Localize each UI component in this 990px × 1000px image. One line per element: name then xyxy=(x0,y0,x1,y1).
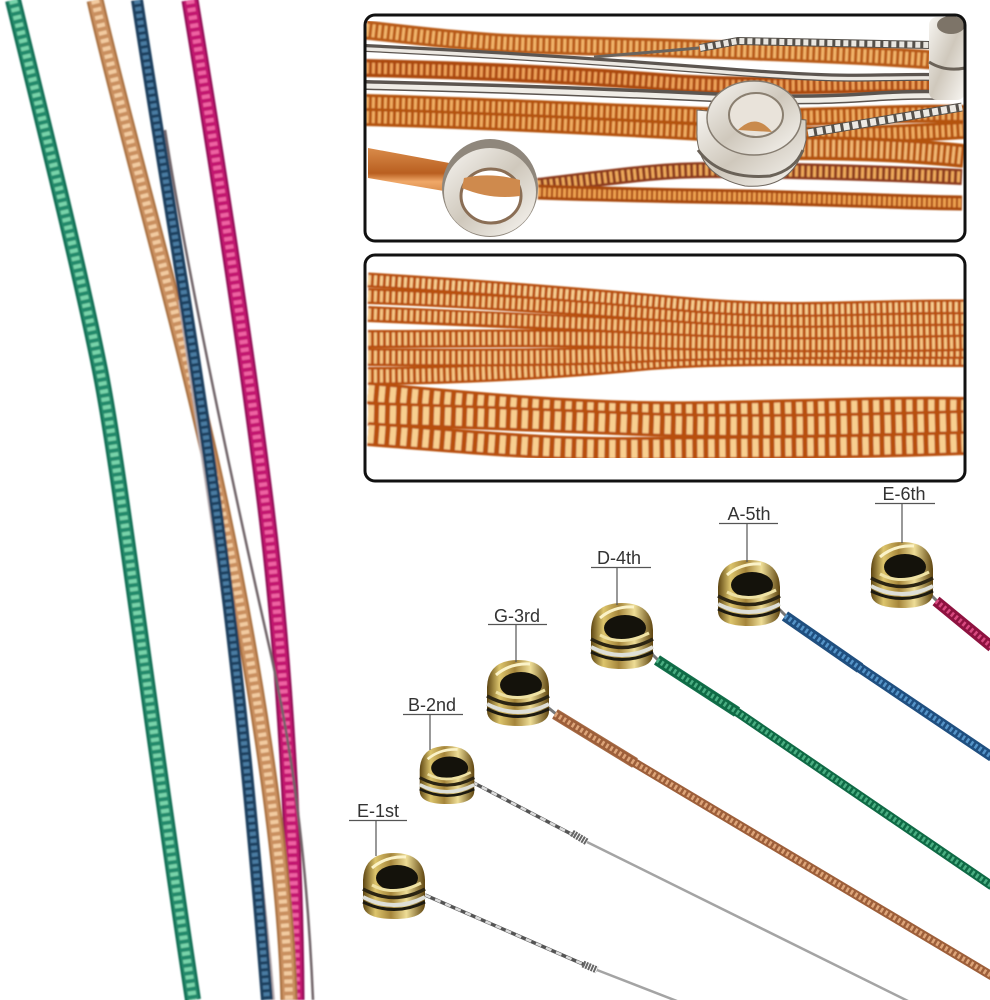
label xyxy=(488,606,547,662)
thin wire: dark xyxy=(165,130,313,1000)
ball end xyxy=(363,853,425,919)
panel background xyxy=(365,255,965,481)
string: A-5th xyxy=(718,504,990,757)
copper coil strings xyxy=(366,30,964,203)
plain copper core xyxy=(368,148,449,191)
wrap xyxy=(583,964,597,970)
ball end xyxy=(871,542,933,608)
wrapped section xyxy=(657,660,990,886)
ring: silver middle xyxy=(697,81,806,186)
string: blue xyxy=(137,0,267,1000)
ball end xyxy=(718,560,780,626)
ball end xyxy=(420,746,474,804)
label: B-2nd xyxy=(408,695,456,715)
plain wire xyxy=(587,842,912,1000)
twisted section xyxy=(472,782,575,836)
label: E-6th xyxy=(882,484,926,504)
twisted wire right xyxy=(808,107,962,133)
wrapped section xyxy=(785,616,990,757)
string: B-2nd xyxy=(403,695,912,1000)
label xyxy=(349,801,407,856)
string: magenta xyxy=(190,0,296,1000)
wrap xyxy=(572,833,587,842)
panel strings and rings xyxy=(366,16,965,237)
panel: ball-end close-up xyxy=(365,15,965,241)
left photo: four coloured strings xyxy=(13,0,313,1000)
string: green xyxy=(13,0,193,1000)
twisted wire top xyxy=(700,41,930,48)
plain wire xyxy=(597,970,682,1000)
wrapped section xyxy=(555,714,990,976)
string: tan xyxy=(95,0,289,1000)
label: D-4th xyxy=(597,548,641,568)
thin wire: light grey xyxy=(180,300,273,1000)
string: E-1st xyxy=(349,801,682,1000)
label xyxy=(875,484,935,543)
ring: silver partial xyxy=(929,16,965,100)
label: A-5th xyxy=(727,504,771,524)
panel frame xyxy=(365,255,965,481)
lead wire xyxy=(545,705,556,714)
panel frame xyxy=(365,15,965,241)
ball end xyxy=(487,660,549,726)
silver wires xyxy=(366,48,945,100)
label: E-1st xyxy=(357,801,399,821)
panel background xyxy=(365,15,965,241)
lead wire xyxy=(928,592,938,602)
panel: copper wound strings close-up xyxy=(365,255,965,481)
wrapped section xyxy=(936,601,990,647)
lead wire xyxy=(648,650,658,660)
coil strands xyxy=(368,280,964,449)
string: E-6th xyxy=(871,484,990,647)
ball end xyxy=(591,603,653,669)
label xyxy=(719,504,778,562)
label xyxy=(403,695,463,750)
twisted section xyxy=(425,895,585,965)
lead wire xyxy=(775,605,786,616)
label: G-3rd xyxy=(494,606,540,626)
label xyxy=(591,548,651,605)
ring: silver front xyxy=(442,139,538,237)
string: D-4th xyxy=(591,548,990,886)
string: G-3rd xyxy=(487,606,990,976)
